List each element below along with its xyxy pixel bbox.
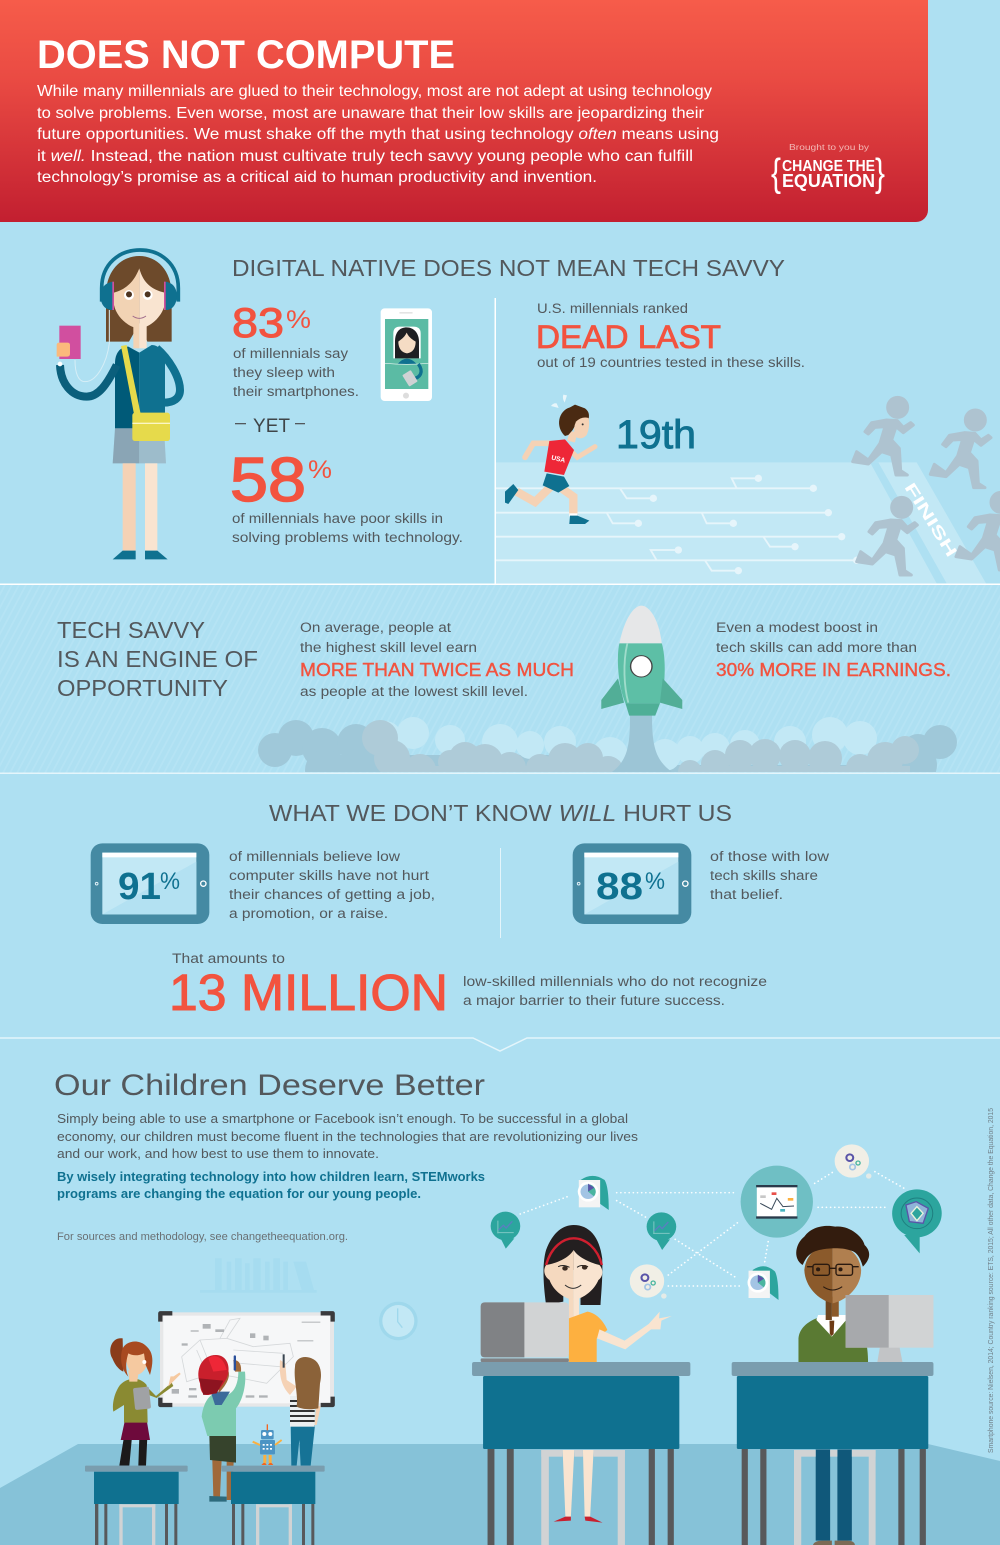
yet separator bbox=[235, 416, 305, 437]
other runners silhouettes bbox=[853, 397, 1000, 575]
heading: our children deserve better: Our Children Deserve Better bbox=[54, 1069, 485, 1102]
stat: dead last: out of 19 countries tested in these skills. bbox=[537, 355, 805, 371]
clock bbox=[379, 1302, 418, 1340]
tablet stat: 91%: % bbox=[160, 868, 180, 895]
rank: 19th: 19th bbox=[616, 413, 696, 457]
text: 30% more in earnings bbox=[716, 620, 951, 680]
icon: gears bubble upper bbox=[835, 1144, 871, 1179]
paragraph: our children: economy, our children must become fluent in the technologies that are revolutionizing our lives bbox=[57, 1129, 639, 1144]
text: 30% more in earnings: 30% MORE IN EARNINGS. bbox=[716, 660, 951, 680]
bookshelf bbox=[200, 1258, 317, 1293]
desk: boy bbox=[732, 1362, 933, 1545]
text: more than twice as much: MORE THAN TWICE AS MUCH bbox=[300, 660, 574, 680]
tablet stat: 88% bbox=[573, 843, 691, 924]
network dotted lines bbox=[520, 1172, 904, 1286]
boy at computer bbox=[796, 1226, 933, 1545]
stat: 83%: of millennials say bbox=[233, 346, 349, 362]
heading: tech savvy: TECH SAVVY bbox=[57, 617, 205, 643]
intro paragraph: future opportunities. We must shake off the myth that using technology often means using bbox=[37, 126, 719, 143]
illustration: students and technology network bbox=[472, 1144, 942, 1545]
illustration: children at whiteboard bbox=[85, 1258, 418, 1545]
tablet stat: 91% bbox=[91, 843, 209, 924]
girl with long hair bbox=[280, 1354, 321, 1466]
text: 88% detail: tech skills share bbox=[710, 868, 818, 884]
illustration: USA runner bbox=[505, 395, 595, 524]
stat: 83%: 83 bbox=[232, 299, 284, 346]
text: 91% detail: of millennials believe low bbox=[229, 849, 401, 865]
text: 88% detail: of those with low bbox=[710, 849, 830, 865]
stat: 83% bbox=[232, 299, 359, 400]
text: 91% detail: computer skills have not hurt bbox=[229, 868, 429, 884]
logo: Change the Equation bbox=[771, 142, 885, 195]
yet separator: YET bbox=[253, 416, 290, 437]
icon: chart pin center bbox=[647, 1212, 676, 1250]
logo: Change the Equation: } bbox=[875, 152, 885, 195]
girl at laptop bbox=[481, 1225, 672, 1523]
robot toy bbox=[253, 1424, 282, 1465]
paragraph: our children: and our work, and how best to use them to innovate. bbox=[57, 1146, 379, 1161]
logo: Change the Equation: { bbox=[771, 152, 781, 195]
tablet stat: 88%: 88 bbox=[596, 866, 643, 908]
stat: 58%: of millennials have poor skills in bbox=[232, 511, 443, 527]
stat: 58%: % bbox=[308, 456, 332, 484]
stat: 13 million: a major barrier to their future success. bbox=[463, 993, 725, 1009]
whiteboard bbox=[160, 1312, 334, 1407]
stat: 58%: 58 bbox=[230, 446, 306, 515]
desk: girl bbox=[472, 1362, 690, 1545]
tablet stat: 91%: 91 bbox=[118, 866, 161, 908]
text: 30% more in earnings: Even a modest boost in bbox=[716, 620, 878, 636]
stat: dead last: U.S. millennials ranked bbox=[537, 301, 688, 317]
text: 88% detail bbox=[710, 849, 830, 903]
sources note: For sources and methodology, see changetheequation.org. bbox=[57, 1231, 348, 1243]
title: DOES NOT COMPUTE bbox=[37, 33, 455, 77]
text: more than twice as much bbox=[300, 620, 574, 700]
vertical source credit: Smartphone source: Nielsen, 2014; Country ranking source: ETS, 2015; All other data, Change the Equation, 2015 bbox=[986, 1108, 995, 1453]
panel: tech savvy engine of opportunity bbox=[0, 584, 1000, 790]
rocket exhaust bbox=[612, 715, 672, 772]
intro paragraph: While many millennials are glued to their technology, most are not adept at using technology bbox=[37, 83, 712, 100]
girl with tablet bbox=[110, 1338, 180, 1466]
classroom floor bbox=[0, 1444, 1000, 1545]
stat: 58% bbox=[230, 446, 463, 546]
header banner bbox=[0, 0, 928, 222]
stat: 83%: their smartphones. bbox=[233, 384, 359, 400]
finish line label: FINISH bbox=[901, 480, 960, 560]
stat: 58%: solving problems with technology. bbox=[232, 530, 463, 546]
text: 88% detail: that belief. bbox=[710, 887, 783, 903]
callout: STEMworks bbox=[57, 1169, 485, 1201]
text: 91% detail bbox=[229, 849, 435, 922]
icon: radar pin bbox=[892, 1189, 942, 1253]
heading: tech savvy: OPPORTUNITY bbox=[57, 675, 228, 701]
stat: 83%: % bbox=[286, 306, 311, 334]
intro paragraph: it well. Instead, the nation must cultivate truly tech savvy young people who can fulfill bbox=[37, 148, 693, 165]
stat: 13 million: 13 MILLION bbox=[169, 964, 448, 1021]
illustration: USA runner: USA bbox=[551, 454, 566, 465]
stat: dead last: DEAD LAST bbox=[536, 319, 721, 355]
boy with red cap bbox=[198, 1355, 245, 1502]
stat: 13 million bbox=[169, 951, 767, 1021]
heading: tech savvy: IS AN ENGINE OF bbox=[57, 646, 258, 672]
stat: 13 million: low-skilled millennials who do not recognize bbox=[463, 974, 767, 990]
icon: pie document bottom bbox=[748, 1266, 779, 1300]
icon: pie document top bbox=[578, 1176, 609, 1210]
illustration: girl with headphones bbox=[57, 250, 180, 559]
icon: chart pin left bbox=[491, 1212, 520, 1249]
text: 30% more in earnings: tech skills can add more than bbox=[716, 640, 917, 656]
text: 91% detail: their chances of getting a job, bbox=[229, 887, 435, 903]
heading: tech savvy bbox=[57, 617, 258, 701]
text: more than twice as much: the highest skill level earn bbox=[300, 640, 477, 656]
stat: 13 million: That amounts to bbox=[172, 951, 285, 967]
stat: dead last bbox=[536, 301, 805, 371]
clouds bbox=[258, 717, 957, 772]
logo: Change the Equation: Brought to you by bbox=[789, 142, 870, 152]
paragraph: our children bbox=[57, 1111, 639, 1161]
tablet stat: 88%: % bbox=[645, 868, 665, 895]
text: more than twice as much: as people at the lowest skill level. bbox=[300, 684, 528, 700]
callout: STEMworks: programs are changing the equation for our young people. bbox=[57, 1186, 421, 1201]
callout: STEMworks: By wisely integrating technology into how children learn, STEMworks bbox=[57, 1169, 485, 1184]
desk right bbox=[222, 1466, 325, 1545]
paragraph: our children: Simply being able to use a smartphone or Facebook isn’t enough. To be successful in a global bbox=[57, 1111, 628, 1126]
heading: digital native: DIGITAL NATIVE DOES NOT MEAN TECH SAVVY bbox=[232, 255, 785, 281]
text: 91% detail: a promotion, or a raise. bbox=[229, 906, 388, 922]
text: more than twice as much: On average, people at bbox=[300, 620, 451, 636]
illustration: race track bbox=[496, 462, 986, 583]
heading: what we don't know: WHAT WE DON’T KNOW WILL HURT US bbox=[269, 800, 732, 826]
intro paragraph bbox=[37, 83, 719, 186]
logo: Change the Equation: CHANGE THE bbox=[782, 158, 875, 175]
logo: Change the Equation: EQUATION bbox=[782, 171, 875, 191]
icon: smartphone with sleeping girl bbox=[381, 308, 432, 401]
intro paragraph: to solve problems. Even worse, most are unaware that their low skills are jeopardizing their bbox=[37, 105, 704, 122]
rocket bbox=[601, 606, 682, 716]
stat: 83%: they sleep with bbox=[233, 365, 335, 381]
desk left bbox=[85, 1466, 188, 1545]
intro paragraph: technology’s promise as a critical aid to human productivity and invention. bbox=[37, 169, 597, 186]
icon: presentation chart bbox=[741, 1166, 813, 1238]
icon: gears bubble lower bbox=[630, 1264, 667, 1299]
